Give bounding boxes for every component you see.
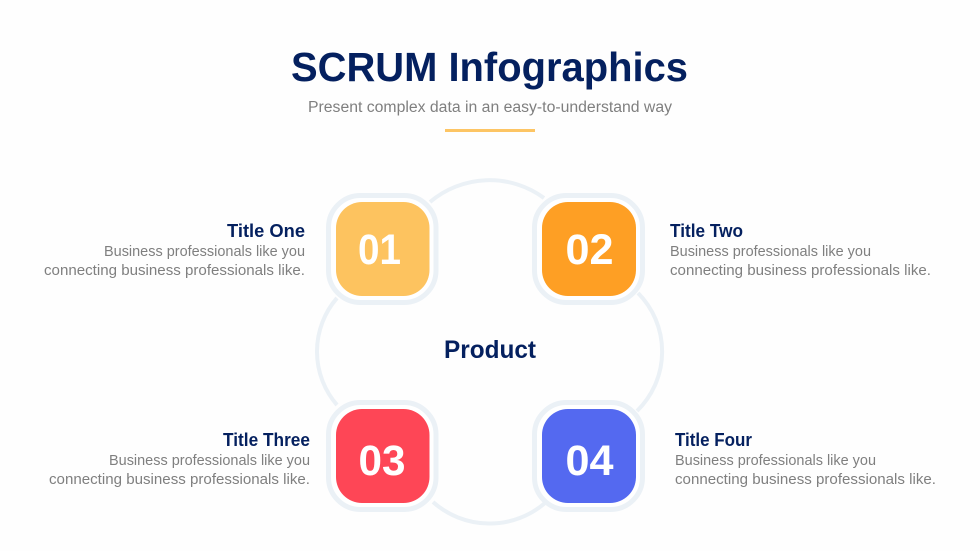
badge 02: 02 [566, 226, 614, 274]
text block: Title Three: Business professionals like you [109, 452, 310, 469]
text block: Title One: Business professionals like you [104, 243, 305, 260]
text block: Title Three: connecting business professionals like. [49, 471, 310, 488]
title: SCRUM Infographics [291, 44, 688, 90]
text block: Title Four: connecting business professionals like. [675, 471, 936, 488]
text block: Title Four [675, 430, 936, 488]
center label: Product: Product [444, 336, 537, 364]
text block: Title Four: Title Four [675, 430, 752, 450]
badge 03: 03 [358, 437, 406, 485]
text block: Title Two: Title Two [670, 221, 743, 241]
text block: Title One: Title One [227, 221, 305, 241]
text block: Title Two: Business professionals like you [670, 243, 871, 260]
badge 01 [328, 196, 436, 302]
text block: Title Two [670, 221, 931, 279]
text block: Title Two: connecting business professionals like. [670, 262, 931, 279]
badge 01: 01 [358, 226, 401, 274]
text block: Title One: connecting business professionals like. [44, 262, 305, 279]
badge 02 [534, 196, 642, 302]
badge 04: 04 [566, 437, 614, 485]
text block: Title Four: Business professionals like you [675, 452, 876, 469]
text block: Title Three: Title Three [223, 430, 310, 450]
subtitle: Present complex data in an easy-to-understand way [308, 99, 672, 116]
text block: Title Three [49, 430, 310, 488]
accent rule [445, 129, 535, 132]
badge 04 [534, 402, 642, 510]
badge 03 [328, 402, 436, 510]
text block: Title One [44, 221, 305, 279]
central clover outline [317, 180, 662, 524]
